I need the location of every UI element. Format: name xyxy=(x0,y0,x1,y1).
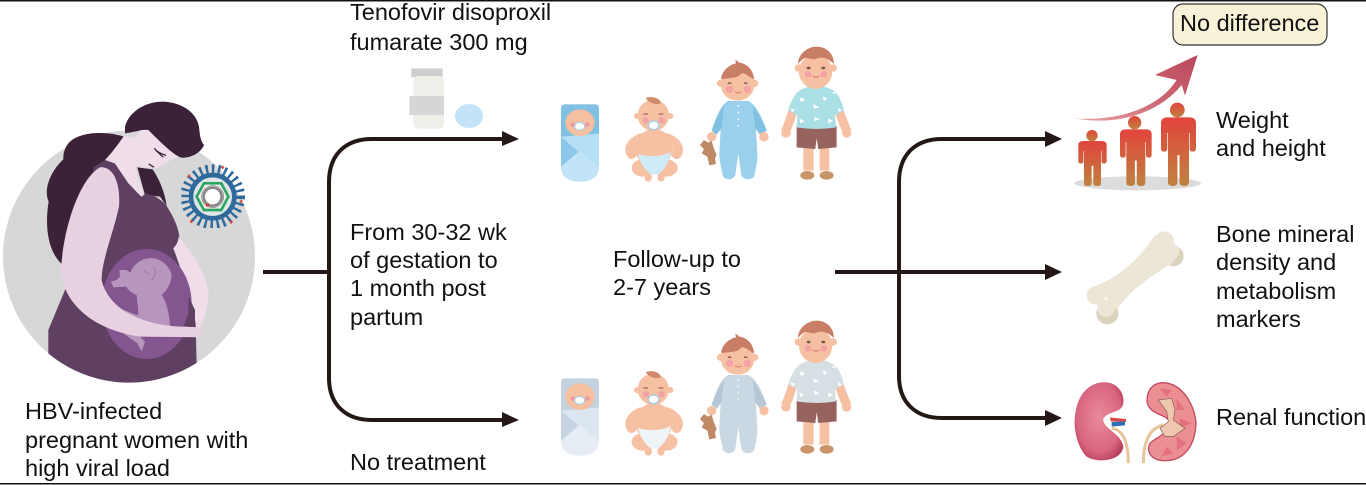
text: treatment duration: 1 month post xyxy=(350,275,486,301)
fetus eye xyxy=(143,267,155,280)
icon: medicine bottle and tablet xyxy=(409,68,483,129)
ground shadow xyxy=(1074,176,1201,190)
text: treatment duration: From 30-32 wk xyxy=(350,219,507,245)
arrow: branching to treatment groups xyxy=(263,131,519,427)
ureters xyxy=(1112,425,1163,463)
text: bone markers: markers xyxy=(1216,306,1301,332)
children: treatment group xyxy=(561,47,851,182)
swaddled newborn xyxy=(561,104,599,182)
womb xyxy=(102,249,192,359)
text: treatment arm: fumarate 300 mg xyxy=(350,29,528,55)
text: treatment duration: partum xyxy=(350,304,423,330)
text: control arm: No treatment xyxy=(350,449,486,475)
boy in shirt and shorts xyxy=(781,47,851,180)
fingers xyxy=(184,297,195,327)
virus spikes xyxy=(185,169,241,225)
left kidney xyxy=(1075,382,1124,460)
hair xyxy=(47,102,204,264)
hair behind shoulder xyxy=(137,167,167,206)
text: follow-up: Follow-up to xyxy=(613,246,741,272)
dress xyxy=(48,160,197,387)
children: no treatment group xyxy=(561,321,851,456)
icon: growth chart with people xyxy=(1074,55,1201,190)
text: study population: pregnant women with xyxy=(25,427,248,453)
toddler with teddy bear xyxy=(700,59,769,179)
face and neck xyxy=(105,130,178,197)
viral envelope xyxy=(191,175,234,218)
fetus xyxy=(111,258,172,352)
text: bone markers: Bone mineral xyxy=(1216,221,1354,247)
renal pelvis xyxy=(1158,398,1185,437)
text: bone markers: density and xyxy=(1216,249,1336,275)
text: study population: HBV-infected xyxy=(25,398,162,424)
eyelid xyxy=(149,148,166,167)
people of increasing size xyxy=(1078,103,1196,186)
capsid xyxy=(197,183,228,210)
growth arrow xyxy=(1075,55,1198,121)
callout: no difference xyxy=(1173,4,1327,45)
arrow: branching to outcomes xyxy=(835,131,1062,426)
antigen markers xyxy=(187,165,243,224)
illustration: pregnant woman with fetus xyxy=(3,102,255,387)
icon: hepatitis B virus xyxy=(185,165,243,225)
right kidney xyxy=(1147,383,1196,461)
text: study population: high viral load xyxy=(25,455,170,481)
seated baby xyxy=(630,97,678,182)
icon: bone xyxy=(1087,231,1184,324)
text: follow-up: 2-7 years xyxy=(613,274,711,300)
text: weight and height: and height xyxy=(1216,135,1326,161)
arm xyxy=(61,167,202,337)
blood vessels xyxy=(1110,417,1126,422)
belly xyxy=(173,237,209,328)
text: bone markers: metabolism xyxy=(1216,278,1336,304)
callout: no difference: No difference xyxy=(1180,10,1319,36)
gray background circle xyxy=(3,131,255,383)
renal pyramids xyxy=(1160,388,1192,457)
text: weight and height: Weight xyxy=(1216,107,1289,133)
icon: kidneys xyxy=(1075,382,1196,463)
text: renal function: Renal function xyxy=(1216,404,1366,430)
text: treatment duration: of gestation to xyxy=(350,247,498,273)
viral DNA xyxy=(204,188,222,206)
